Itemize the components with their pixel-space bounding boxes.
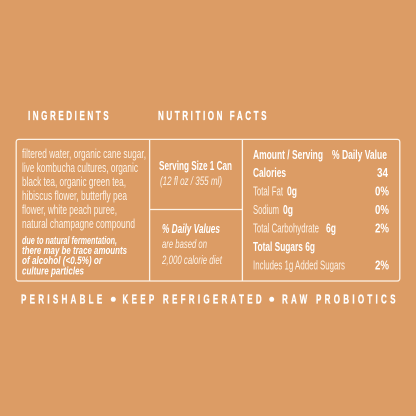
text block: fermentation note: culture particles: [22, 266, 84, 278]
heading: ingredients: INGREDIENTS: [28, 109, 109, 124]
row: calories: [253, 166, 388, 180]
row: added sugars: Includes 1g Added Sugars: [253, 258, 345, 272]
text block: ingredients list: natural champagne compound: [22, 216, 135, 231]
text block: serving size: (12 fl oz / 355 ml): [160, 174, 222, 188]
text block: serving size: Serving Size 1 Can: [159, 159, 232, 173]
heading: nutrition facts: NUTRITION FACTS: [158, 109, 266, 124]
row: total carbohydrate: 2%: [375, 222, 389, 236]
text block: serving size: [159, 159, 232, 188]
row: calories: 34: [377, 166, 388, 180]
row: total fat: 0%: [375, 184, 389, 198]
text block: fermentation note: of alcohol (<0.5%) or: [22, 255, 103, 267]
text block: ingredients list: filtered water, organic cane sugar,: [22, 146, 146, 161]
row: sodium: 0g: [283, 203, 293, 217]
text block: ingredients list: hibiscus flower, butterfly pea: [22, 188, 127, 203]
text block: ingredients list: flower, white peach puree,: [22, 202, 117, 217]
row: total carbohydrate: 6g: [326, 222, 336, 236]
text block: ingredients list: black tea, organic green tea,: [22, 174, 126, 189]
nutrition table: [253, 148, 389, 272]
panel: label table: [16, 139, 400, 281]
text block: daily values note: [161, 222, 222, 267]
row: sodium: [253, 202, 389, 217]
row: total fat: [253, 184, 389, 198]
row: total fat: Total Fat: [253, 184, 283, 198]
row: sodium: 0%: [375, 203, 389, 217]
row: added sugars: 2%: [375, 258, 389, 272]
row: total fat: 0g: [287, 184, 297, 198]
text block: fermentation note: due to natural fermentation,: [22, 235, 117, 247]
text block: daily values note: % Daily Values: [162, 222, 220, 236]
text block: fermentation note: [22, 235, 127, 278]
text block: ingredients list: live kombucha cultures, organic: [22, 160, 138, 175]
row: total carbohydrate: Total Carbohydrate: [253, 220, 319, 236]
table header: Amount / Serving: [253, 148, 323, 162]
text block: ingredients list: [22, 146, 146, 231]
footer banner: PERISHABLE • KEEP REFRIGERATED • RAW PROBIOTICS: [21, 293, 395, 307]
row: sodium: Sodium: [253, 202, 279, 217]
text block: fermentation note: there may be trace amounts: [22, 245, 127, 257]
table header: % Daily Value: [332, 148, 387, 162]
row: total sugars: Total Sugars 6g: [253, 240, 315, 254]
text block: daily values note: 2,000 calorie diet: [161, 253, 222, 267]
text block: daily values note: are based on: [162, 237, 207, 251]
row: calories: Calories: [253, 166, 286, 180]
